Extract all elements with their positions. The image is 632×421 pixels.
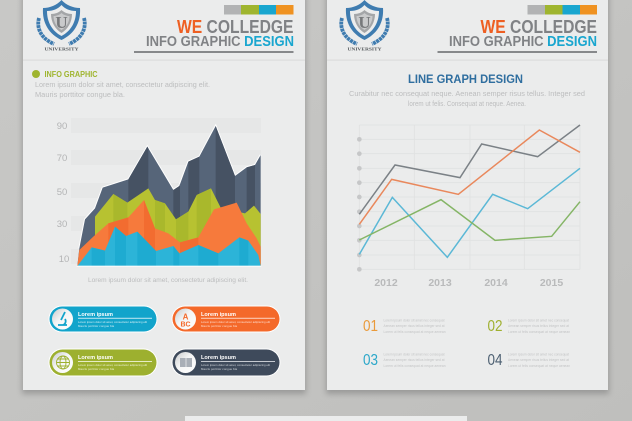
- icon: university logo: [341, 0, 388, 52]
- pill: book: [172, 348, 280, 376]
- stat 03: 03: [363, 352, 378, 369]
- intro text: lorem ut felis. Consequat at neque. Aenea.: [408, 101, 526, 108]
- pill: abc: Lorem ipsum dolor sit amet, consectetur adipiscing elit: [201, 320, 270, 324]
- stat 02: Lorem ut felis consequat at neque aenean: [508, 330, 570, 334]
- header rule: [438, 51, 597, 53]
- pill: abc: BC: [180, 322, 191, 328]
- stat 02: 02: [488, 318, 502, 335]
- pill: abc: [172, 306, 280, 332]
- intro text: Mauris porttitor congue bla.: [35, 90, 125, 99]
- stat 02: [488, 318, 570, 335]
- intro text: Curabitur nec consequat neque. Aenean semper risus tellus. Integer sed: [349, 91, 585, 98]
- y axis labels: [57, 121, 69, 265]
- pill: abc: Mauris porttitor congue bla: [201, 324, 237, 328]
- x axis labels: 2015: [540, 277, 563, 289]
- area chart: [57, 110, 261, 267]
- x axis labels: 2012: [374, 277, 398, 289]
- x axis labels: 2014: [484, 277, 508, 289]
- stat 01: 01: [363, 318, 378, 335]
- y axis labels: 30: [57, 219, 67, 230]
- stat 04: Lorem ipsum dolor sit amet nec consequat: [508, 352, 569, 356]
- colour swatches: [224, 5, 294, 14]
- y axis labels: 10: [59, 254, 69, 265]
- chart background bands: [71, 118, 261, 264]
- heading: info graphic design: INFO GRAPHIC DESIGN: [449, 34, 597, 50]
- pill: microscope: Mauris porttitor congue bla: [78, 324, 114, 328]
- pill: abc: Lorem ipsum: [201, 312, 237, 318]
- pill: globe: Mauris porttitor congue bla: [78, 367, 114, 371]
- stat 02: Lorem ipsum dolor sit amet nec consequat: [508, 318, 569, 322]
- stat 04: 04: [488, 352, 503, 369]
- panel: partial lower page: [185, 416, 467, 421]
- pill: globe: Lorem ipsum: [78, 355, 114, 361]
- intro text: Lorem ipsum dolor sit amet, consectetur adipiscing elit.: [35, 80, 210, 89]
- chart caption: Lorem ipsum dolor sit amet, consectetur adipiscing elit.: [88, 277, 248, 284]
- stat 01: Lorem ut felis consequat at neque aenean: [384, 330, 446, 334]
- section heading: line graph design: LINE GRAPH DESIGN: [408, 74, 523, 86]
- section heading: info graphic: INFO GRAPHIC: [44, 70, 98, 79]
- intro text: [35, 80, 210, 99]
- stat 04: Lorem ut felis consequat at neque aenean: [508, 364, 570, 368]
- stat 04: Aenean semper risus tellus integer sed at: [508, 358, 569, 362]
- stat 01: [363, 318, 446, 335]
- stat 01: Aenean semper risus tellus integer sed at: [384, 324, 445, 328]
- icon: microscope: [58, 312, 67, 325]
- colour swatches: [528, 5, 597, 14]
- icon: book: [180, 358, 192, 367]
- intro text: [349, 91, 585, 108]
- stat 02: Aenean semper risus tellus integer sed at: [508, 324, 569, 328]
- y axis labels: 90: [57, 121, 67, 132]
- icon: abc: A: [183, 312, 189, 322]
- pill: microscope: Lorem ipsum dolor sit amet, consectetur adipiscing elit: [78, 320, 147, 324]
- stat 03: Lorem ipsum dolor sit amet nec consequat: [384, 352, 445, 356]
- icon: globe: [56, 356, 70, 369]
- pill: book: Lorem ipsum: [201, 355, 237, 361]
- pill: microscope: [48, 306, 158, 332]
- stat 03: [363, 352, 446, 369]
- panel: right page: [326, 0, 609, 394]
- heading: we colledge: WE COLLEDGE: [177, 17, 294, 37]
- x axis labels: 2013: [428, 277, 452, 289]
- chart grid: [359, 125, 580, 269]
- pill: globe: [48, 348, 158, 376]
- heading: info graphic design: INFO GRAPHIC DESIGN: [146, 34, 294, 50]
- line chart: [357, 125, 580, 289]
- heading: we colledge: WE COLLEDGE: [480, 17, 597, 37]
- pill: microscope: Lorem ipsum: [78, 312, 114, 318]
- y axis labels: 50: [57, 187, 67, 198]
- axis dots: [357, 137, 362, 272]
- pill: book: Lorem ipsum dolor sit amet, consectetur adipiscing elit: [201, 363, 270, 367]
- stat 03: Lorem ut felis consequat at neque aenean: [384, 364, 446, 368]
- panel: left page: [22, 0, 306, 394]
- header rule: [134, 51, 294, 53]
- stat 04: [488, 352, 570, 369]
- icon: university logo: [38, 0, 85, 52]
- pill: globe: Lorem ipsum dolor sit amet, consectetur adipiscing elit: [78, 363, 147, 367]
- stat 01: Lorem ipsum dolor sit amet nec consequat: [384, 318, 445, 322]
- pill: book: Mauris porttitor congue bla: [201, 367, 237, 371]
- series lines: [359, 125, 580, 257]
- stat 03: Aenean semper risus tellus integer sed at: [384, 358, 445, 362]
- stacked areas: [77, 110, 261, 267]
- x axis labels: [374, 277, 563, 289]
- y axis labels: 70: [57, 153, 67, 164]
